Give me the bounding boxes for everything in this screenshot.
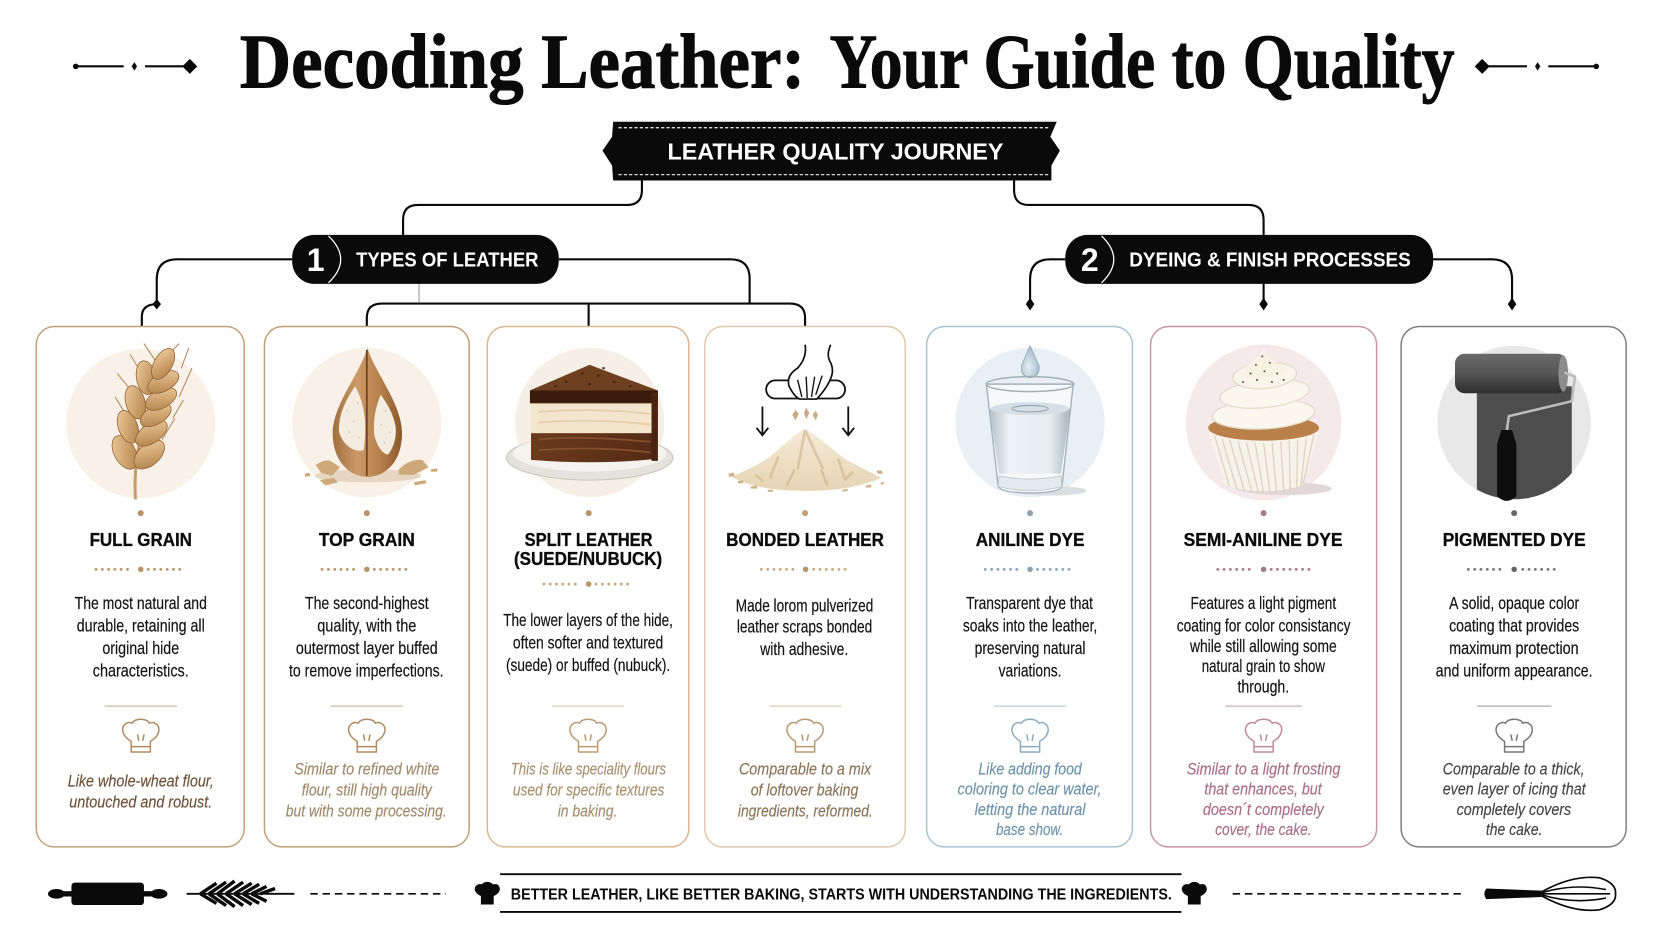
- description: quality, with the: [317, 616, 416, 636]
- analogy: completely covers: [1457, 800, 1572, 819]
- icon: whisk: [1484, 877, 1616, 910]
- analogy: Similar to a light frosting: [1187, 759, 1341, 778]
- description: coating for color consistancy: [1177, 616, 1351, 636]
- heading: SEMI-ANILINE DYE: [1184, 530, 1343, 550]
- description: while still allowing some: [1189, 636, 1337, 656]
- description: soaks into the leather,: [963, 616, 1097, 636]
- icon: paint roller: [1437, 346, 1591, 504]
- icon: wheat sprig: [187, 881, 294, 907]
- analogy: doesn´t completely: [1203, 800, 1325, 819]
- description: leather scraps bonded: [737, 617, 872, 637]
- analogy: Comparable to a thick,: [1443, 759, 1585, 778]
- icon: chef hat: [1496, 719, 1532, 752]
- analogy: used for specific textures: [513, 781, 665, 800]
- description: variations.: [999, 660, 1062, 680]
- analogy: in baking.: [558, 802, 617, 821]
- icon: hand pressing scraps into a pile: [728, 345, 884, 492]
- icon: split grain kernel: [292, 348, 441, 497]
- description: The lower layers of the hide,: [503, 610, 673, 630]
- analogy: This is like speciality flours: [511, 759, 666, 778]
- icon: chef hat: [787, 719, 823, 752]
- icon: chef hat: [123, 719, 159, 752]
- connectors: banner to sections: [403, 180, 1264, 235]
- section pill 2: dyeing and finish processes: 2: [1081, 242, 1099, 278]
- icon: frosted cupcake: [1186, 345, 1341, 500]
- description: The second-highest: [305, 593, 429, 613]
- section pill 2: dyeing and finish processes: DYEING & FINISH PROCESSES: [1129, 249, 1411, 271]
- panel: top grain: [264, 327, 469, 847]
- description: [736, 595, 873, 659]
- analogy: [68, 772, 214, 811]
- title: [240, 19, 1455, 105]
- divider: left dashed line: [310, 893, 446, 895]
- description: coating that provides: [1449, 616, 1579, 636]
- analogy: [738, 759, 873, 821]
- icon: footer chef hat left: [475, 882, 500, 904]
- description: Features a light pigment: [1191, 593, 1336, 613]
- panel: full grain: [36, 327, 244, 847]
- description: [1436, 593, 1593, 680]
- description: [503, 610, 673, 675]
- description: to remove imperfections.: [289, 660, 444, 680]
- description: [963, 593, 1097, 680]
- analogy: of loftover baking: [751, 781, 859, 800]
- ornament: title left: [73, 59, 197, 74]
- section pill 1: types of leather: TYPES OF LEATHER: [356, 249, 539, 271]
- icon: chef hat: [1245, 719, 1282, 752]
- panel: semi-aniline dye: [1151, 327, 1377, 847]
- panel: aniline dye: [927, 327, 1132, 847]
- icon: layered cake slice: [507, 348, 673, 497]
- icon: wheat ear: [66, 344, 215, 499]
- heading: ANILINE DYE: [976, 530, 1084, 550]
- icon: chef hat: [349, 719, 385, 752]
- ornament: title right: [1475, 59, 1599, 74]
- divider: right dashed line: [1233, 893, 1464, 895]
- description: durable, retaining all: [77, 616, 205, 636]
- icon: footer chef hat right: [1182, 882, 1207, 904]
- description: outermost layer buffed: [296, 638, 438, 658]
- analogy: but with some processing.: [286, 802, 447, 821]
- description: natural grain to show: [1202, 656, 1325, 676]
- analogy: untouched and robust.: [69, 792, 212, 811]
- heading: FULL GRAIN: [90, 530, 192, 550]
- analogy: [511, 759, 666, 821]
- analogy: even layer of icing that: [1443, 780, 1587, 799]
- analogy: Like whole-wheat flour,: [68, 772, 214, 791]
- panel: pigmented dye: [1401, 327, 1626, 847]
- panel: split leather: [487, 327, 689, 847]
- analogy: Like adding food: [978, 759, 1082, 778]
- analogy: Similar to refined white: [294, 759, 439, 778]
- description: with adhesive.: [760, 639, 848, 659]
- heading: PIGMENTED DYE: [1443, 530, 1586, 550]
- heading: [514, 530, 662, 569]
- description: A solid, opaque color: [1449, 593, 1579, 613]
- icon: chef hat: [1012, 719, 1048, 752]
- section pill 1: types of leather: 1: [307, 242, 325, 278]
- description: often softer and textured: [513, 633, 663, 653]
- description: (suede) or buffed (nubuck).: [506, 655, 670, 675]
- title: Your Guide to Quality: [830, 19, 1455, 105]
- banner: leather quality journey: [602, 122, 1060, 180]
- icon: glass of water with drop: [955, 346, 1105, 497]
- icon: chef hat: [570, 719, 606, 752]
- analogy: [286, 759, 447, 821]
- description: maximum protection: [1449, 638, 1579, 658]
- analogy: coloring to clear water,: [958, 780, 1102, 799]
- analogy: [958, 759, 1102, 839]
- description: The most natural and: [75, 593, 207, 613]
- heading: SPLIT LEATHER: [525, 530, 653, 550]
- analogy: cover, the cake.: [1215, 820, 1312, 839]
- description: Transparent dye that: [966, 593, 1093, 613]
- section pill 2: dyeing and finish processes: [1065, 235, 1433, 284]
- title: Decoding Leather:: [240, 19, 805, 105]
- heading: BONDED LEATHER: [726, 530, 884, 550]
- connectors: section 1 to cards: [142, 259, 805, 327]
- analogy: flour, still high quality: [302, 781, 433, 800]
- heading: TOP GRAIN: [319, 530, 415, 550]
- description: [75, 593, 207, 680]
- description: [1177, 593, 1351, 696]
- heading: (SUEDE/NUBUCK): [514, 549, 662, 569]
- description: and uniform appearance.: [1436, 660, 1593, 680]
- description: original hide: [102, 638, 179, 658]
- description: [289, 593, 444, 680]
- callout: closing message: BETTER LEATHER, LIKE BETTER BAKING, STARTS WITH UNDERSTANDING THE INGREDIENTS.: [511, 887, 1172, 904]
- analogy: Comparable to a mix: [739, 759, 872, 778]
- description: characteristics.: [93, 660, 189, 680]
- description: through.: [1237, 676, 1289, 696]
- analogy: base show.: [996, 820, 1063, 839]
- icon: rolling pin: [48, 883, 167, 905]
- analogy: [1187, 759, 1341, 839]
- analogy: ingredients, reformed.: [738, 802, 873, 821]
- section pill 1: types of leather: [292, 235, 559, 284]
- connectors: section 2 to cards: [1026, 259, 1516, 311]
- panel: bonded leather: [705, 327, 905, 847]
- analogy: [1443, 759, 1587, 839]
- analogy: letting the natural: [975, 800, 1087, 819]
- description: preserving natural: [975, 638, 1086, 658]
- analogy: the cake.: [1486, 820, 1542, 839]
- description: Made lorom pulverized: [736, 595, 873, 615]
- analogy: that enhances, but: [1204, 780, 1323, 799]
- banner: leather quality journey: LEATHER QUALITY JOURNEY: [668, 139, 1003, 165]
